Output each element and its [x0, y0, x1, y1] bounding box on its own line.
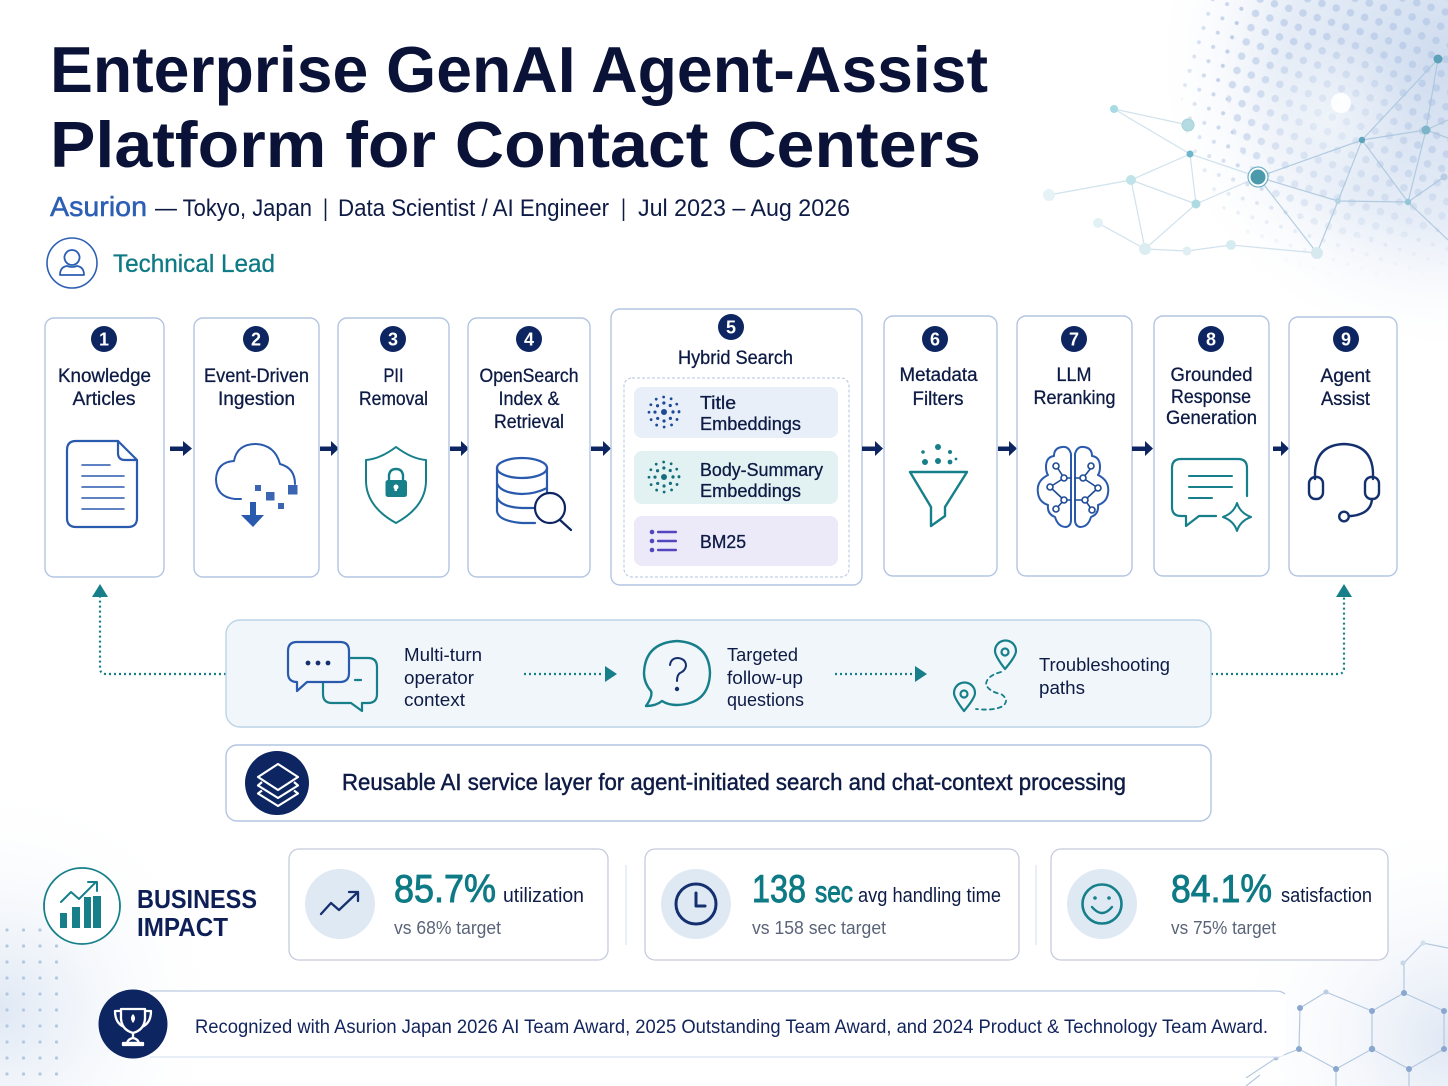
decorative network graph	[1043, 54, 1448, 259]
panel: step 2 event-driven ingestion	[194, 318, 319, 577]
search method: title embeddings: Embeddings	[700, 413, 801, 434]
subtitle: |	[621, 195, 626, 222]
arrow	[835, 666, 927, 682]
text: targeted follow-up questions: Targeted	[727, 644, 798, 665]
subtitle: — Tokyo, Japan	[155, 195, 312, 222]
arrow	[524, 666, 617, 682]
badge 6	[922, 326, 948, 352]
dashed container	[624, 378, 849, 577]
search method: title embeddings: Title	[700, 392, 736, 413]
text: award recognition: Recognized with Asurion Japan 2026 AI Team Award, 2025 Outstanding Team Award, and 2024 Product & Technology Team Award.	[195, 1017, 1268, 1038]
arrow	[998, 441, 1017, 456]
badge 1: 1	[99, 330, 109, 350]
label: opensearch index and retrieval: Retrieval	[494, 412, 564, 433]
label: event-driven ingestion	[204, 366, 309, 410]
metric card: handling time	[645, 849, 1019, 960]
metric card: satisfaction	[1051, 849, 1388, 960]
search method: bm25: BM25	[700, 531, 746, 552]
badge 2	[243, 326, 269, 352]
badge 7: 7	[1069, 330, 1079, 350]
panel: step 5 hybrid search	[611, 309, 862, 585]
search method: title embeddings	[634, 387, 838, 438]
label: agent assist: Assist	[1321, 389, 1371, 410]
value: 85.7% utilization: utilization	[503, 885, 584, 907]
icon: troubleshooting route	[954, 640, 1016, 711]
arrow	[862, 441, 883, 456]
label: knowledge articles: Articles	[72, 389, 136, 410]
text: targeted follow-up questions	[727, 644, 804, 710]
label: metadata filters: Filters	[912, 389, 964, 410]
subtitle	[50, 191, 850, 222]
badge 4: 4	[524, 330, 534, 350]
subtitle: Data Scientist / AI Engineer	[338, 195, 609, 222]
search method: body-summary embeddings	[634, 451, 838, 504]
icon: chat with sparkle	[1172, 459, 1251, 531]
label: grounded response generation: Generation	[1166, 408, 1257, 429]
label: llm reranking: Reranking	[1034, 388, 1116, 409]
value: 84.1% satisfaction: 84.1%	[1171, 868, 1272, 911]
badge 9: 9	[1341, 330, 1351, 350]
panel: step 3 pii removal	[338, 318, 449, 577]
icon: database search	[497, 458, 571, 530]
panel: step 6 metadata filters	[884, 316, 997, 576]
target: vs 68%: vs 68% target	[394, 918, 501, 938]
label: hybrid search: Hybrid Search	[678, 348, 793, 369]
arrow	[1273, 441, 1289, 456]
icon: smiley	[1067, 869, 1137, 939]
search method: body-summary embeddings: Embeddings	[700, 480, 801, 501]
decorative dotted globe	[1182, 0, 1448, 256]
arrow	[170, 441, 192, 456]
icon: trophy	[98, 990, 168, 1058]
search method: body-summary embeddings: Body-Summary	[700, 459, 824, 480]
value: 138 sec avg handling time	[752, 868, 1001, 911]
label: llm reranking: LLM	[1056, 365, 1092, 386]
badge 5: 5	[726, 318, 736, 338]
panel: step 7 llm reranking	[1017, 316, 1132, 576]
label: pii removal: PII	[384, 366, 404, 387]
title: Enterprise GenAI Agent-Assist	[50, 33, 988, 106]
arrow	[591, 441, 611, 456]
icon: shield lock	[366, 447, 426, 523]
panel: step 8 grounded response generation	[1154, 316, 1269, 576]
text: troubleshooting paths: Troubleshooting	[1039, 654, 1170, 675]
panel: step 9 agent assist	[1289, 317, 1397, 576]
badge 7	[1061, 326, 1087, 352]
label: grounded response generation: Response	[1171, 387, 1251, 408]
text: targeted follow-up questions: follow-up	[727, 667, 803, 688]
decorative hexagon network	[1246, 940, 1448, 1086]
badge 5	[718, 314, 744, 340]
label: opensearch index and retrieval: OpenSearch	[480, 366, 578, 387]
value: 138 sec avg handling time: avg handling time	[858, 885, 1001, 907]
label: pii removal	[359, 366, 428, 410]
arrow	[1132, 441, 1153, 456]
text: multi-turn operator context: operator	[404, 667, 474, 688]
panel: reusable ai service layer	[226, 745, 1211, 821]
value: 138 sec avg handling time: 138	[752, 868, 806, 911]
icon: trend arrow	[305, 869, 375, 939]
badge 9	[1333, 326, 1359, 352]
badge 8: 8	[1206, 330, 1216, 350]
value: 84.1% satisfaction: satisfaction	[1281, 885, 1372, 907]
arrow	[320, 441, 339, 456]
icon: clock	[661, 869, 731, 939]
business impact heading: BUSINESS	[137, 884, 257, 914]
value: 138 sec avg handling time: sec	[815, 876, 853, 909]
feedback arrow to step 9	[1211, 584, 1352, 674]
text: multi-turn operator context	[404, 644, 482, 710]
icon: chat bubbles	[288, 642, 377, 711]
icon: growth chart	[44, 868, 120, 944]
metric card: utilization	[289, 849, 608, 960]
label: grounded response generation	[1166, 365, 1257, 429]
label: agent assist: Agent	[1320, 366, 1371, 387]
panel: conversation context	[226, 620, 1211, 727]
text: troubleshooting paths: paths	[1039, 677, 1085, 698]
badge 4	[516, 326, 542, 352]
text: multi-turn operator context: Multi-turn	[404, 644, 482, 665]
arrow	[450, 441, 469, 456]
label: agent assist	[1320, 366, 1371, 410]
subtitle: Jul 2023 – Aug 2026	[638, 195, 850, 222]
label: knowledge articles	[58, 366, 151, 410]
business impact heading: IMPACT	[137, 912, 228, 942]
target: vs 158 sec: vs 158 sec target	[752, 918, 886, 938]
badge 8	[1198, 326, 1224, 352]
label: llm reranking	[1034, 365, 1116, 409]
icon: question bubble	[644, 641, 710, 706]
badge 6: 6	[930, 330, 940, 350]
panel: step 1 knowledge articles	[45, 318, 164, 577]
label: knowledge articles: Knowledge	[58, 366, 151, 387]
label: metadata filters: Metadata	[900, 365, 978, 386]
business impact heading	[44, 868, 257, 944]
icon: funnel	[910, 444, 967, 526]
label: metadata filters	[900, 365, 978, 410]
badge 2: 2	[251, 330, 261, 350]
search method: bm25	[634, 516, 838, 566]
badge 3: 3	[388, 330, 398, 350]
badge 3	[380, 326, 406, 352]
label: pii removal: Removal	[359, 389, 428, 410]
text: targeted follow-up questions: questions	[727, 689, 804, 710]
award banner	[98, 990, 1285, 1058]
value: 85.7% utilization: 85.7%	[394, 868, 496, 911]
decorative corner dots	[0, 922, 66, 1086]
subtitle: Asurion	[50, 191, 147, 222]
icon: neural brain	[1038, 447, 1108, 527]
label: event-driven ingestion: Ingestion	[218, 389, 295, 410]
text: multi-turn operator context: context	[404, 689, 465, 710]
label: opensearch index and retrieval: Index &	[498, 389, 560, 410]
target: vs 75%: vs 75% target	[1171, 918, 1276, 938]
panel: step 4 opensearch index and retrieval	[468, 318, 590, 577]
value: 84.1% satisfaction	[1171, 868, 1372, 911]
icon: document	[67, 441, 137, 527]
label: event-driven ingestion: Event-Driven	[204, 366, 309, 387]
icon: headset	[1309, 444, 1379, 521]
badge 1	[91, 326, 117, 352]
title	[50, 33, 988, 181]
label: opensearch index and retrieval	[480, 366, 578, 433]
icon: cloud ingestion	[216, 444, 298, 527]
feedback arrow to step 1	[92, 584, 226, 674]
value: 85.7% utilization	[394, 868, 584, 911]
text: troubleshooting paths	[1039, 654, 1170, 698]
text: service layer statement: Reusable AI service layer for agent-initiated search and chat-context processing	[342, 769, 1126, 795]
title: Platform for Contact Centers	[50, 108, 981, 181]
role badge: technical lead	[47, 238, 275, 288]
label: grounded response generation: Grounded	[1170, 365, 1252, 386]
icon: layers	[245, 751, 309, 815]
subtitle: |	[323, 195, 328, 222]
role badge: technical lead: Technical Lead	[113, 250, 275, 278]
